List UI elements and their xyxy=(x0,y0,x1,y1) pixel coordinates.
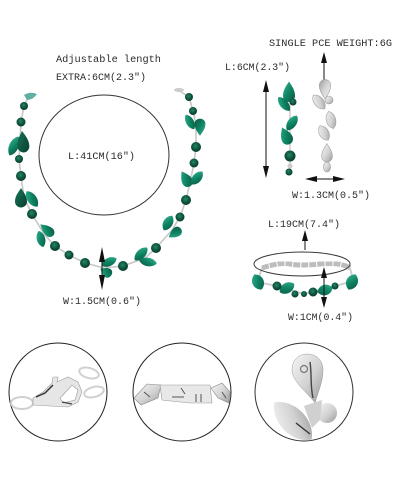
detail circle: silver leaf back xyxy=(255,343,353,448)
arrow: earring weight xyxy=(321,52,327,82)
bracelet length loop xyxy=(254,252,350,276)
bracelet xyxy=(249,264,361,298)
label: bracelet length: L:19CM(7.4") xyxy=(268,219,340,231)
arrow: bracelet length xyxy=(302,230,308,250)
detail circle: box clasp xyxy=(133,343,231,441)
label: necklace width: W:1.5CM(0.6") xyxy=(63,296,141,308)
necklace length loop xyxy=(39,95,169,215)
label: adjustable length: EXTRA:6CM(2.3") xyxy=(56,72,146,84)
detail circle: lobster clasp xyxy=(9,343,107,441)
label: bracelet width: W:1CM(0.4") xyxy=(288,312,353,324)
necklace xyxy=(5,88,206,279)
label: earring weight: SINGLE PCE WEIGHT:6G xyxy=(269,39,392,50)
label: necklace length: L:41CM(16") xyxy=(68,151,135,163)
label: earring length: L:6CM(2.3") xyxy=(225,62,290,74)
green earring xyxy=(275,82,301,176)
silver earring back xyxy=(310,80,338,172)
arrow: bracelet width xyxy=(321,267,327,308)
label: adjustable length: Adjustable length xyxy=(56,54,161,66)
arrow: necklace width xyxy=(99,247,105,290)
arrow: earring width xyxy=(305,176,345,182)
label: earring width: W:1.3CM(0.5") xyxy=(292,190,370,202)
label: adjustable length xyxy=(56,54,161,84)
arrow: earring length xyxy=(263,80,269,178)
